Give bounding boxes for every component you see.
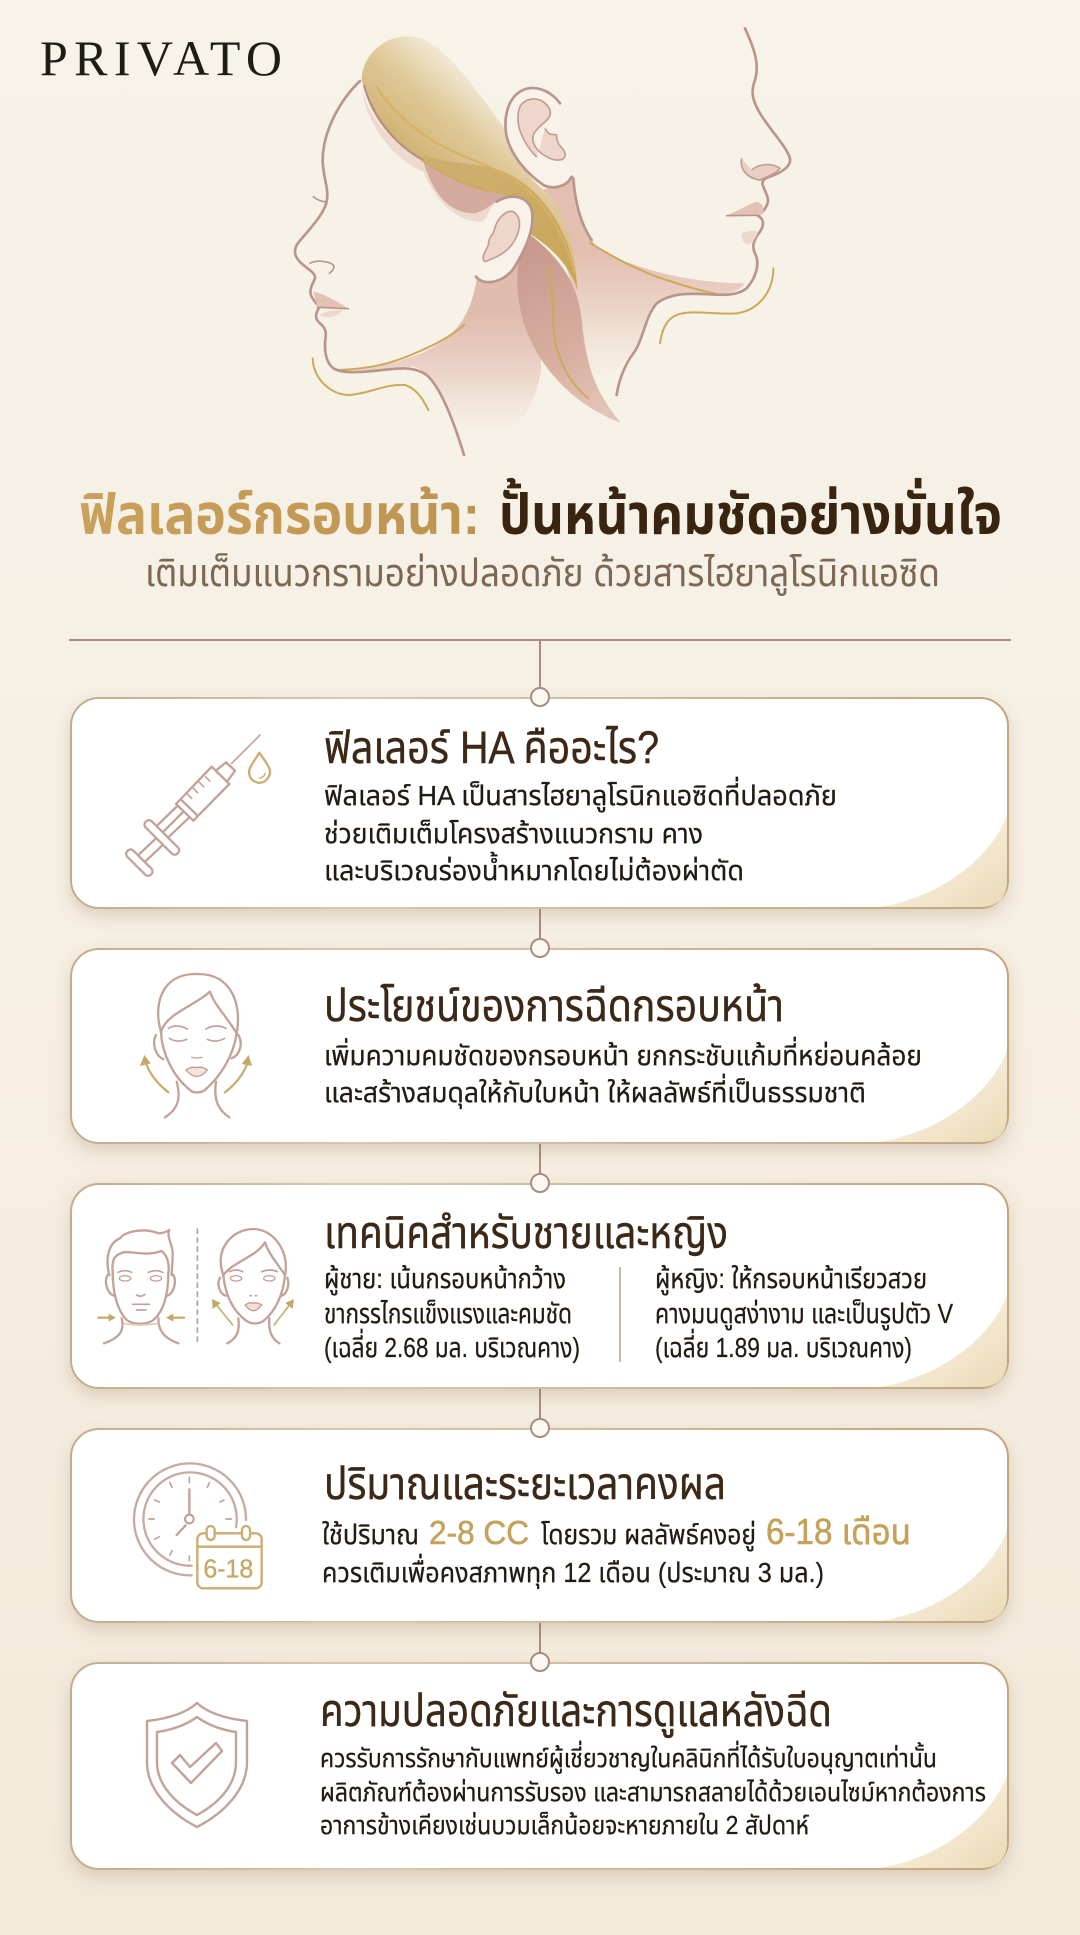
body text: 2-8 CC xyxy=(429,1514,529,1551)
men column: (เฉลี่ย 2.68 มล. บริเวณคาง) xyxy=(324,1328,580,1363)
body text xyxy=(322,1511,911,1589)
title xyxy=(79,477,1002,546)
men column xyxy=(324,1263,580,1363)
neck right xyxy=(532,177,745,383)
icon: male and female faces xyxy=(98,1228,294,1343)
connector node xyxy=(531,1419,549,1437)
heading: ประโยชน์ของการฉีดกรอบหน้า xyxy=(324,980,784,1031)
left ear xyxy=(476,197,532,282)
heading: ปริมาณและระยะเวลาคงผล xyxy=(324,1458,726,1509)
page curl xyxy=(880,815,1007,907)
illustration: two face profiles xyxy=(295,28,790,455)
body text xyxy=(324,1036,922,1109)
body text: โดยรวม ผลลัพธ์คงอยู่ xyxy=(541,1519,756,1552)
connector node xyxy=(531,939,549,957)
body text xyxy=(320,1740,986,1840)
title: ฟิลเลอร์กรอบหน้า: xyxy=(79,483,480,546)
icon: face with lift arrows xyxy=(140,974,252,1117)
panel: technique for men and women xyxy=(71,1174,1008,1388)
page curl xyxy=(880,1295,1007,1387)
body text: และบริเวณร่องน้ำหมากโดยไม่ต้องผ่าตัด xyxy=(324,851,744,886)
men column: ขากรรไกรแข็งแรงและคมชัด xyxy=(324,1298,572,1329)
body text: ควรรับการรักษากับแพทย์ผู้เชี่ยวชาญในคลินิกที่ได้รับใบอนุญาตเท่านั้น xyxy=(320,1740,937,1774)
panel: safety and aftercare xyxy=(71,1653,1008,1869)
body text: และสร้างสมดุลให้กับใบหน้า ให้ผลลัพธ์ที่เป็นธรรมชาติ xyxy=(324,1073,866,1109)
body text: ช่วยเติมเต็มโครงสร้างแนวกราม คาง xyxy=(324,818,703,849)
hair strand xyxy=(517,233,621,423)
neck left xyxy=(337,260,541,439)
women column xyxy=(655,1263,953,1363)
body text: เพิ่มความคมชัดของกรอบหน้า ยกกระชับแก้มที่หย่อนคล้อย xyxy=(324,1036,922,1071)
gold jaw contours xyxy=(660,268,773,343)
body text: ผลิตภัณฑ์ต้องผ่านการรับรอง และสามารถสลายได้ด้วยเอนไซม์หากต้องการ xyxy=(320,1777,986,1807)
women column: ผู้หญิง: ให้กรอบหน้าเรียวสวย xyxy=(655,1263,927,1296)
icon: clock and calendar xyxy=(134,1463,262,1588)
connector node xyxy=(531,1653,549,1671)
connector node xyxy=(531,1174,549,1192)
page curl xyxy=(880,1775,1007,1868)
subtitle: เติมเต็มแนวกรามอย่างปลอดภัย ด้วยสารไฮยาลูโรนิกแอซิด xyxy=(145,553,940,596)
body text: อาการข้างเคียงเช่นบวมเล็กน้อยจะหายภายใน 2 สัปดาห์ xyxy=(320,1810,810,1840)
heading: เทคนิคสำหรับชายและหญิง xyxy=(324,1207,728,1258)
icon: shield with check xyxy=(147,1703,247,1827)
body text: ใช้ปริมาณ xyxy=(322,1519,419,1550)
divider rule and connector xyxy=(69,640,1011,1654)
title: ปั้นหน้าคมชัดอย่างมั่นใจ xyxy=(499,477,1002,546)
women column: คางมนดูสง่างาม และเป็นรูปตัว V xyxy=(655,1298,953,1331)
panel: benefits xyxy=(71,939,1008,1143)
body text xyxy=(324,776,837,886)
right face profile xyxy=(617,28,790,395)
body text: ฟิลเลอร์ HA เป็นสารไฮยาลูโรนิกแอซิดที่ปลอดภัย xyxy=(324,776,837,813)
logo: PRIVATO: PRIVATO xyxy=(40,30,282,86)
page curl xyxy=(880,1050,1007,1142)
icon: syringe with drop xyxy=(124,735,270,878)
heading: ความปลอดภัยและการดูแลหลังฉีด xyxy=(320,1685,832,1738)
hair gold upper xyxy=(362,36,577,290)
dashed separator xyxy=(195,1228,200,1343)
women column: (เฉลี่ย 1.89 มล. บริเวณคาง) xyxy=(655,1328,912,1363)
right ear xyxy=(505,88,572,187)
gold and rose lines xyxy=(549,268,588,398)
connector node xyxy=(531,688,549,706)
left face profile xyxy=(295,81,464,455)
heading: ฟิลเลอร์ HA คืออะไร? xyxy=(324,722,659,773)
page curl xyxy=(880,1530,1007,1621)
body text: ควรเติมเพื่อคงสภาพทุก 12 เดือน (ประมาณ 3 มล.) xyxy=(322,1553,824,1589)
panel: what is HA filler xyxy=(71,688,1008,908)
body text: 6-18 เดือน xyxy=(766,1511,911,1552)
panel: volume and duration xyxy=(71,1419,1008,1622)
men column: ผู้ชาย: เน้นกรอบหน้ากว้าง xyxy=(324,1263,566,1296)
hair pink halo xyxy=(362,90,507,222)
icon: clock and calendar: 6-18 xyxy=(203,1553,253,1583)
